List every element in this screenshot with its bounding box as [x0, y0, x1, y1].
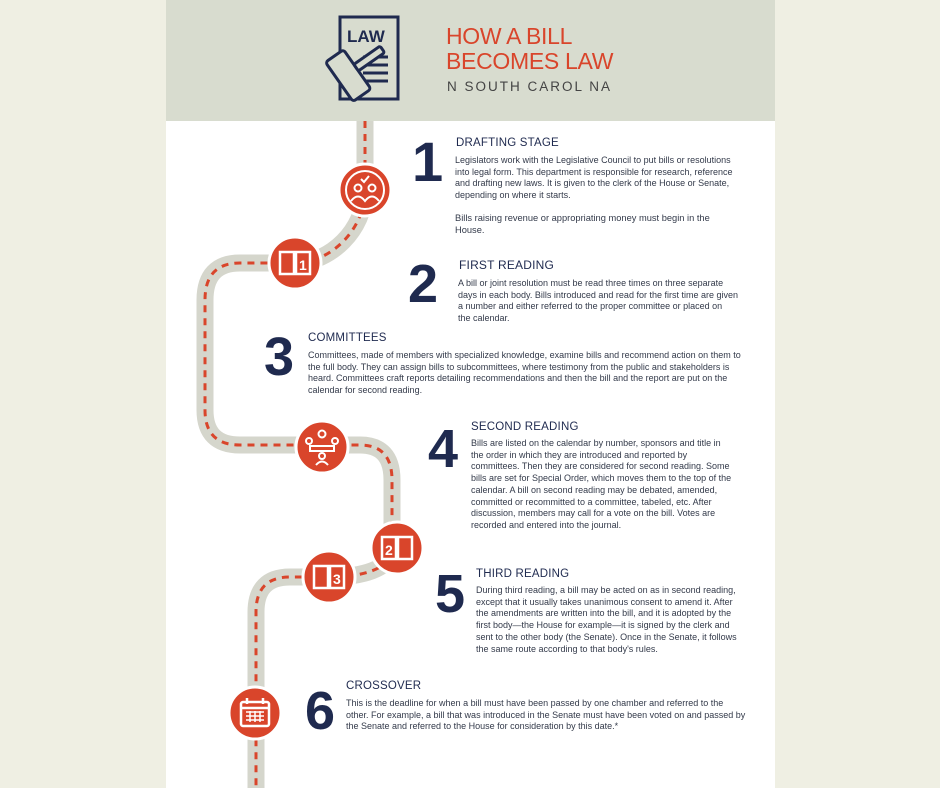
step 1: 1	[412, 130, 443, 193]
step 1: Legislators work with the Legislative Council to put bills or resolutions	[455, 155, 731, 165]
step 6: other. For example, a bill that was introduced in the Senate must have been voted on and passed by	[346, 710, 745, 720]
subtitle: N SOUTH CAROL NA	[447, 79, 612, 94]
step 2: a number and either referred to the proper committee or placed on	[458, 301, 722, 311]
step 5: During third reading, a bill may be acted on as in second reading,	[476, 585, 736, 595]
step 3: calendar for second reading.	[308, 385, 422, 395]
step 1: DRAFTING STAGE	[456, 137, 559, 149]
step 4: committees. Then they are considered for second reading. Some	[471, 461, 729, 471]
step 5: first body—the House for example—it is signed by the clerk and	[476, 620, 730, 630]
step 1	[412, 130, 732, 235]
title: BECOMES LAW	[446, 48, 613, 74]
icon: drafting people	[339, 164, 391, 216]
step 4: 4	[428, 419, 458, 479]
step 5: the same route according to that body's rules.	[476, 644, 658, 654]
step 1: House.	[455, 225, 484, 235]
step 2	[408, 254, 738, 323]
step 6: the Senate and referred to the House for consideration by this date.*	[346, 721, 618, 731]
icon: book 3	[303, 551, 355, 603]
step 4: calendar. A bill on second reading may be debated, amended,	[471, 485, 717, 495]
step 2: 2	[408, 254, 438, 314]
step 4: committed or recommitted to a committee, tabeled, etc. After	[471, 497, 712, 507]
step 4: recorded and entered into the journal.	[471, 520, 621, 530]
step 5: 5	[435, 564, 465, 624]
title: HOW A BILL	[446, 23, 572, 49]
step 3: Committees, made of members with specialized knowledge, examine bills and recommend action on them to	[308, 350, 741, 360]
step 5	[435, 564, 737, 654]
step 4: SECOND READING	[471, 421, 579, 433]
header band	[166, 0, 775, 121]
step 4: the order in which they are introduced and reported by	[471, 450, 687, 460]
step 5: sent to the other body (the Senate). Once in the Senate, it follows	[476, 632, 737, 642]
step 3	[264, 327, 741, 395]
step 1: into legal form. This department is responsible for research, reference	[455, 167, 732, 177]
icon: book 1	[269, 237, 321, 289]
step 4: Bills are listed on the calendar by number, sponsors and title in	[471, 438, 721, 448]
icon: book 1: 1	[299, 257, 307, 273]
title	[446, 23, 614, 74]
step 1: and drafting new laws. It is given to the clerk of the House or Senate,	[455, 178, 729, 188]
step 6: This is the deadline for when a bill must have been passed by one chamber and referred to the	[346, 698, 723, 708]
icon: book 3: 3	[333, 571, 341, 587]
step 2: days in each body. Bills introduced and read for the first time are given	[458, 290, 738, 300]
icon: committee meeting	[296, 421, 348, 473]
step 1: depending on where it starts.	[455, 190, 571, 200]
step 3: 3	[264, 327, 294, 387]
step 4: bills are set for Special Order, which moves them to the top of the	[471, 473, 731, 483]
step 6	[305, 680, 746, 741]
step 2: FIRST READING	[459, 258, 554, 272]
step 1: Bills raising revenue or appropriating money must begin in the	[455, 213, 710, 223]
logo: law document with gavel: LAW	[347, 27, 386, 46]
step 5: the amendments are written into the bill, and it is adopted by the	[476, 608, 731, 618]
step 3: heard. Committees craft reports detailing recommendations and then the bill and the report are put on the	[308, 373, 727, 383]
step 5: except that it usually takes unanimous consent to amend it. After	[476, 597, 733, 607]
icon: book 2: 2	[385, 542, 393, 558]
step 4: discussion, members may call for a vote on the bill. Votes are	[471, 508, 715, 518]
step 6: 6	[305, 681, 335, 741]
icon: book 2	[371, 522, 423, 574]
logo: law document with gavel	[325, 16, 400, 102]
step 3: COMMITTEES	[308, 332, 387, 344]
step 5: THIRD READING	[476, 568, 569, 580]
step 2: A bill or joint resolution must be read three times on three separate	[458, 278, 723, 288]
icon: calendar	[229, 687, 281, 739]
step 4	[428, 419, 731, 530]
step 3: the full body. They can assign bills to subcommittees, where testimony from the public and stakeholders is	[308, 362, 729, 372]
step 2: the calendar.	[458, 313, 510, 323]
step 6: CROSSOVER	[346, 680, 421, 692]
